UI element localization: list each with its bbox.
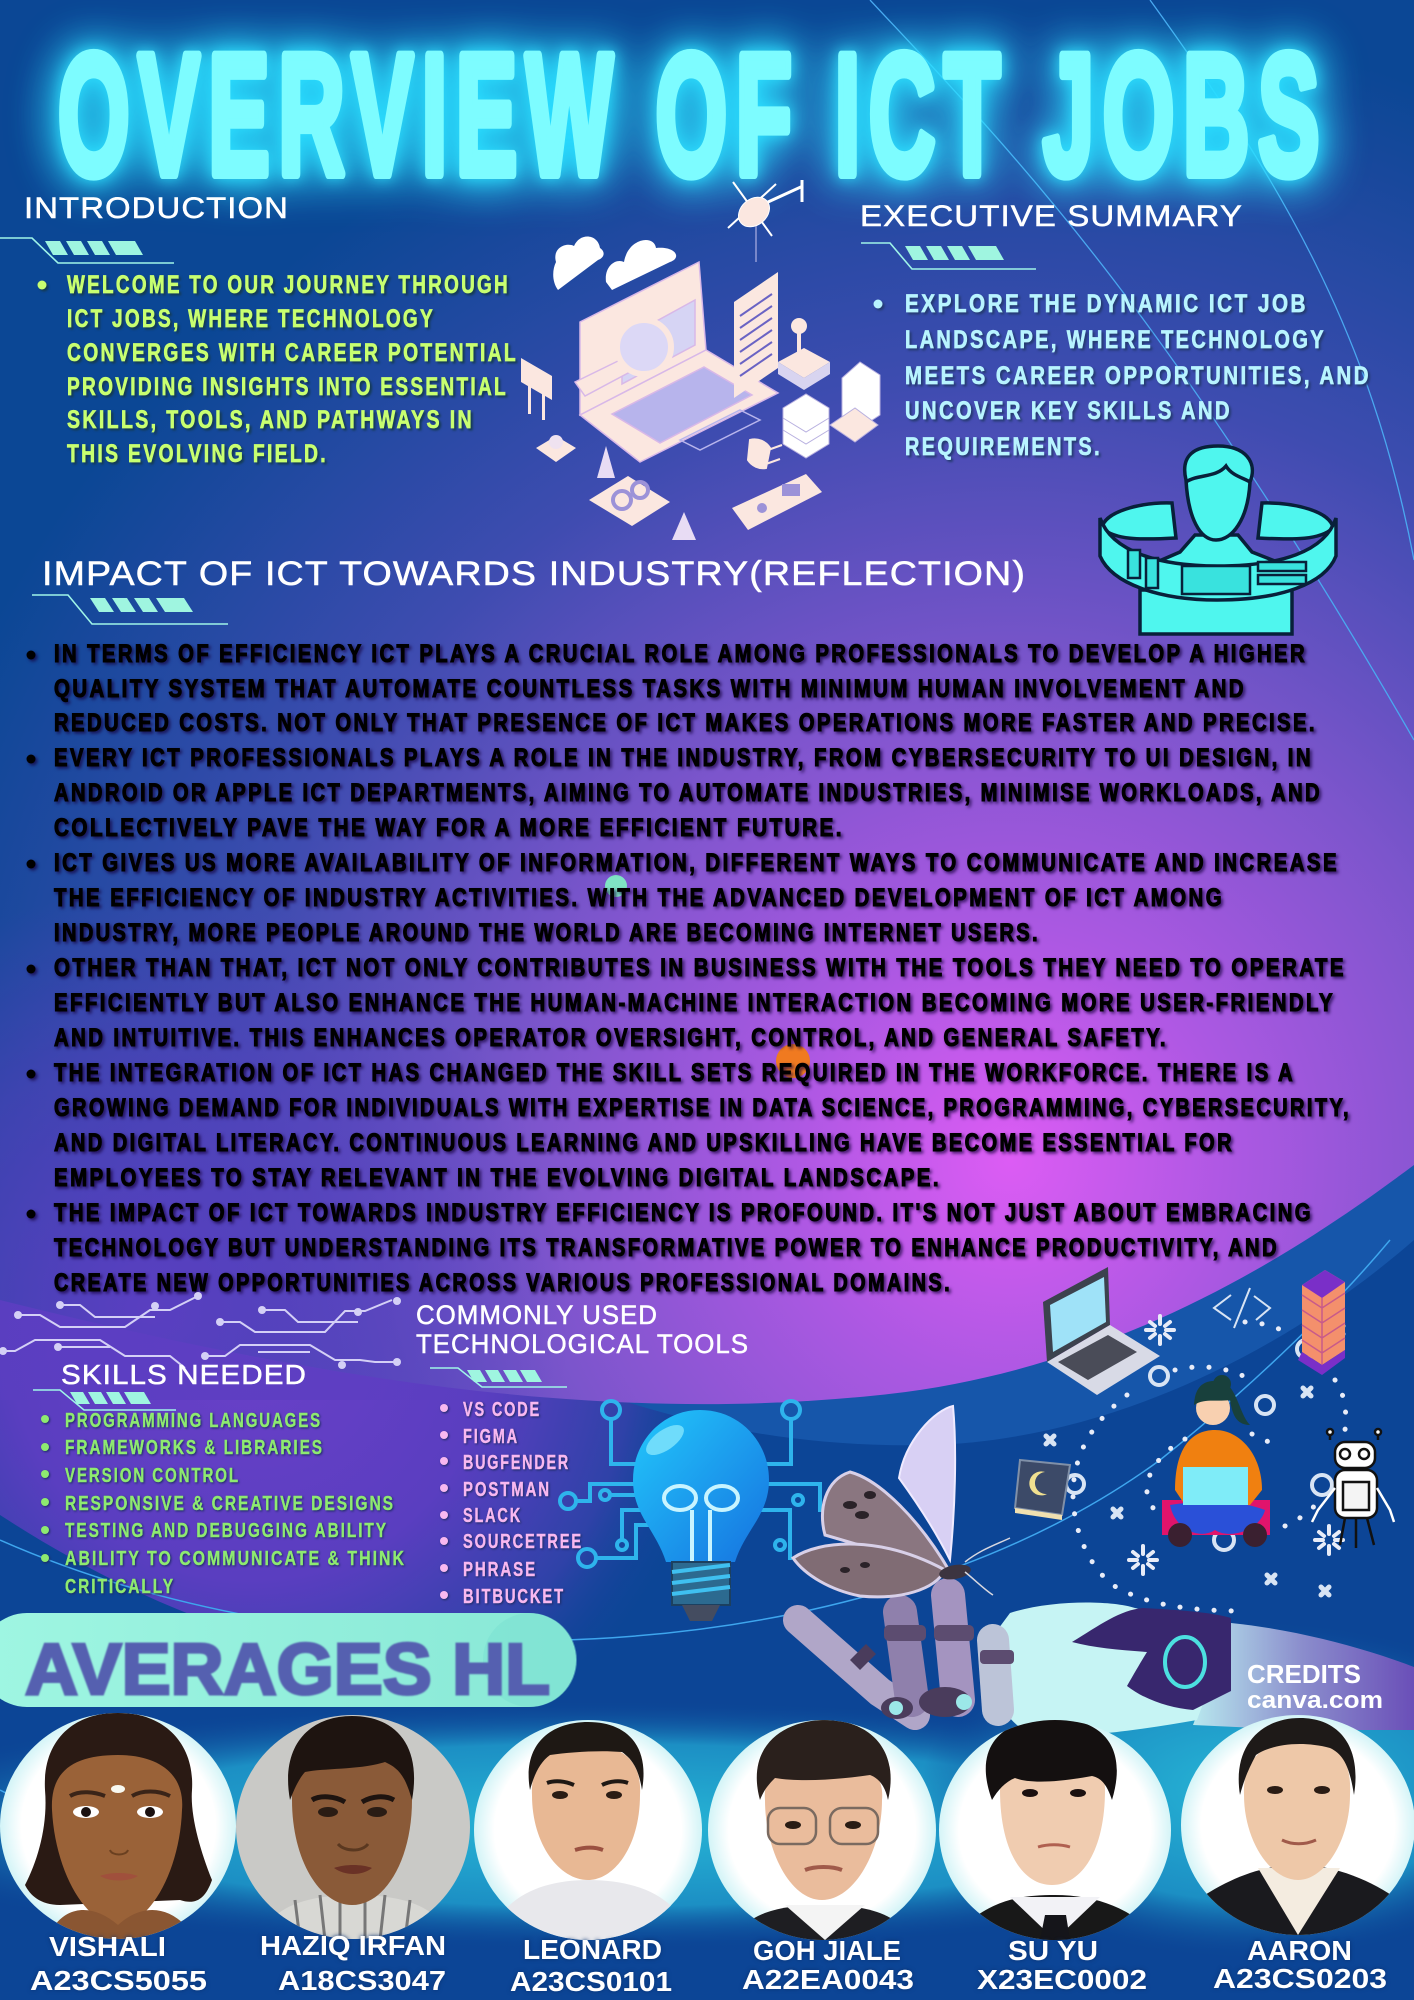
illustration: butterfly on robot hand — [793, 1406, 1414, 1736]
palm — [989, 1603, 1231, 1736]
bullet 3: INDUSTRY, MORE PEOPLE AROUND THE WORLD ARE BECOMING INTERNET USERS. — [54, 919, 1040, 947]
icon: cone lower — [672, 512, 696, 540]
list: tools — [440, 1399, 583, 1608]
heading: commonly used technological tools: TECHNOLOGICAL TOOLS — [416, 1329, 749, 1359]
bullet 2 — [26, 744, 1322, 842]
heading: skills needed — [33, 1359, 307, 1410]
panel: technological tools — [416, 1300, 749, 1608]
name: Su Yu — [977, 1935, 1147, 1995]
icon: signboard — [521, 358, 552, 420]
text: introduction: PROVIDING INSIGHTS INTO ESSENTIAL — [67, 373, 508, 401]
text: introduction: CONVERGES WITH CAREER POTENTIAL — [67, 339, 518, 367]
name: Su Yu: SU YU — [1008, 1935, 1098, 1966]
list: tools: FIGMA — [463, 1426, 519, 1448]
photo: Haziq Irfan — [236, 1715, 473, 1940]
name: Goh Jiale: GOH JIALE — [753, 1935, 901, 1966]
photo: Su Yu — [938, 1718, 1172, 1940]
photo: Goh Jiale — [708, 1720, 936, 1940]
text: introduction: ICT JOBS, WHERE TECHNOLOGY — [67, 305, 435, 333]
illustration: isometric laptop — [521, 180, 880, 540]
text: introduction: THIS EVOLVING FIELD. — [67, 440, 328, 468]
heading: impact of ict — [32, 555, 1026, 624]
list: tools: POSTMAN — [463, 1479, 551, 1501]
mechanical wrist — [1072, 1608, 1231, 1710]
banner: team name: AVERAGES HL — [25, 1630, 550, 1710]
flowers — [1129, 1316, 1343, 1574]
bullet 5: EMPLOYEES TO STAY RELEVANT IN THE EVOLVING DIGITAL LANDSCAPE. — [54, 1164, 941, 1192]
list: tools: BUGFENDER — [463, 1452, 570, 1474]
list: tools: SLACK — [463, 1505, 522, 1527]
bullet 5 — [26, 1059, 1351, 1192]
icon: plug — [748, 439, 782, 468]
text: executive summary — [874, 290, 1371, 461]
list: tools: PHRASE — [463, 1559, 537, 1581]
name: Goh Jiale: A22EA0043 — [742, 1964, 914, 1995]
icon: light bulb with circuits — [560, 1401, 860, 1621]
text: executive summary: EXPLORE THE DYNAMIC ICT JOB — [905, 290, 1308, 318]
list: skills: ABILITY TO COMMUNICATE & THINK — [65, 1548, 406, 1570]
photo: Leonard — [474, 1720, 702, 1940]
icon: clouds — [553, 236, 676, 290]
panel: skills needed — [33, 1359, 406, 1598]
bullet 4 — [26, 954, 1346, 1052]
text: introduction: SKILLS, TOOLS, AND PATHWAYS IN — [67, 406, 474, 434]
text: introduction: WELCOME TO OUR JOURNEY THROUGH — [67, 271, 510, 299]
heading: commonly used technological tools — [416, 1300, 749, 1387]
credits: canva.com — [1247, 1687, 1383, 1714]
photo: Vishali — [0, 1712, 237, 1945]
icon: server stack — [783, 362, 880, 458]
thumb — [798, 1620, 915, 1715]
name: Aaron: A23CS0203 — [1213, 1963, 1387, 1994]
name: Vishali — [30, 1931, 207, 1996]
icon: butterfly — [793, 1406, 1010, 1597]
text: executive summary: REQUIREMENTS. — [905, 433, 1102, 461]
bullet 6: CREATE NEW OPPORTUNITIES ACROSS VARIOUS PROFESSIONAL DOMAINS. — [54, 1269, 952, 1297]
name: Vishali: VISHALI — [49, 1931, 166, 1962]
name: Aaron: AARON — [1247, 1935, 1352, 1966]
bullet 2: COLLECTIVELY PAVE THE WAY FOR A MORE EFFICIENT FUTURE. — [54, 814, 844, 842]
icon: book — [1015, 1460, 1070, 1520]
heading: introduction: INTRODUCTION — [24, 192, 289, 225]
name: Leonard: A23CS0101 — [510, 1966, 672, 1997]
bullet 1 — [26, 640, 1317, 737]
bullet 4: AND INTUITIVE. THIS ENHANCES OPERATOR OVERSIGHT, CONTROL, AND GENERAL SAFETY. — [54, 1024, 1168, 1052]
icon: woman with laptop — [1162, 1375, 1270, 1547]
list: skills: RESPONSIVE & CREATIVE DESIGNS — [65, 1493, 395, 1515]
photo: Aaron — [1180, 1715, 1414, 1940]
fingers — [900, 1612, 912, 1700]
credits — [1247, 1659, 1383, 1714]
icon: controller tile — [732, 474, 822, 530]
name: Aaron — [1213, 1935, 1387, 1994]
name: Leonard: LEONARD — [523, 1934, 662, 1965]
heading: impact of ict: IMPACT OF ICT TOWARDS INDUSTRY(REFLECTION) — [42, 555, 1026, 593]
list: tools: BITBUCKET — [463, 1586, 565, 1608]
text: impact bullets — [26, 640, 1351, 1297]
heading: skills needed: SKILLS NEEDED — [61, 1359, 307, 1390]
icon: cone — [597, 446, 615, 478]
bullet 6 — [26, 1199, 1313, 1297]
list: skills: TESTING AND DEBUGGING ABILITY — [65, 1520, 388, 1542]
icon: helicopter — [728, 180, 803, 262]
credits: CREDITS — [1247, 1659, 1361, 1689]
name: Goh Jiale — [742, 1935, 914, 1995]
names — [30, 1930, 1387, 1997]
icon: laptop top right — [1043, 1267, 1160, 1395]
heading: introduction — [0, 192, 289, 263]
marker dots — [605, 875, 810, 1078]
name: Haziq Irfan: HAZIQ IRFAN — [260, 1930, 446, 1961]
list: skills: PROGRAMMING LANGUAGES — [65, 1410, 322, 1432]
dotted arcs — [1073, 1322, 1346, 1611]
heading: executive summary: EXECUTIVE SUMMARY — [860, 200, 1243, 233]
icon: robot — [1312, 1429, 1394, 1548]
list: tools: VS CODE — [463, 1399, 541, 1421]
icon: document — [734, 272, 778, 398]
bullet 3 — [26, 849, 1339, 947]
list: skills: FRAMEWORKS & LIBRARIES — [65, 1437, 324, 1459]
icon: person with holographic ring — [1100, 446, 1336, 634]
icon: robot hand — [798, 1595, 1414, 1736]
name: Haziq Irfan: A18CS3047 — [278, 1965, 446, 1996]
text: executive summary: UNCOVER KEY SKILLS AND — [905, 397, 1232, 425]
decoration: dotted spiral and symbols — [1046, 1288, 1346, 1615]
icon: button tile — [536, 435, 576, 462]
name: Su Yu: X23EC0002 — [977, 1964, 1147, 1995]
name: Vishali: A23CS5055 — [30, 1965, 207, 1996]
list: skills — [41, 1410, 406, 1598]
name: Haziq Irfan — [260, 1930, 446, 1996]
icon: building — [1298, 1270, 1345, 1375]
heading: commonly used technological tools: COMMONLY USED — [416, 1300, 658, 1330]
list: tools: SOURCETREE — [463, 1531, 583, 1553]
text: introduction — [38, 271, 518, 468]
icon: gears tile — [589, 476, 670, 526]
circuit lines decoration — [0, 1292, 401, 1369]
icon: laptop — [575, 262, 778, 462]
list: skills: CRITICALLY — [65, 1576, 175, 1598]
heading: executive summary — [860, 200, 1243, 269]
name: Leonard — [510, 1934, 672, 1997]
icon: joystick — [778, 318, 830, 390]
list: skills: VERSION CONTROL — [65, 1465, 240, 1487]
forearm — [1193, 1623, 1414, 1730]
